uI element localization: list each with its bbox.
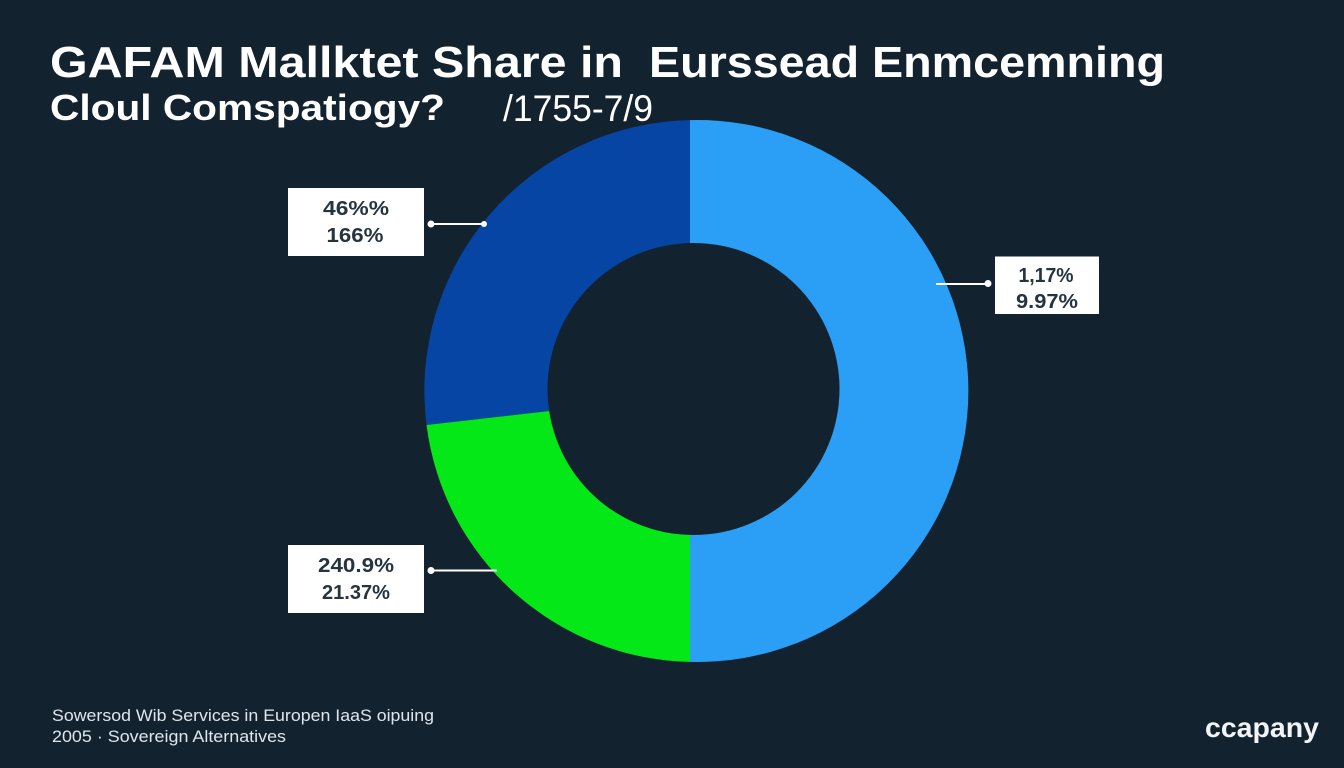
label box — [288, 545, 424, 613]
title line 1, first part: GAFAM Mallktet Share in — [50, 38, 623, 87]
connector — [428, 567, 497, 574]
title date range: /1755-7/9 — [503, 88, 653, 129]
label values — [323, 198, 389, 247]
label values: 240.9% — [318, 555, 394, 577]
label values: 9.97% — [1016, 291, 1078, 313]
footer source note: 2005 · Sovereign Alternatives — [52, 727, 286, 746]
label values — [318, 555, 394, 604]
label values: 21.37% — [322, 582, 390, 604]
donut chart — [424, 120, 968, 662]
segment: light blue — [690, 120, 968, 662]
segment: dark blue — [424, 120, 690, 425]
connector — [936, 280, 992, 287]
callout: green segment — [288, 545, 497, 613]
title line 2: Cloul Comspatiogy? — [50, 87, 445, 128]
footer source note: Sowersod Wib Services in Europen IaaS oipuing — [52, 706, 434, 725]
label values: 1,17% — [1018, 265, 1074, 287]
label values — [1016, 265, 1078, 313]
segment: green — [426, 395, 690, 662]
footer source note — [52, 706, 434, 746]
label box — [288, 188, 424, 256]
title line 1, second part: Eurssead Enmcemning — [649, 38, 1165, 87]
callout: dark blue segment — [288, 188, 487, 256]
connector — [428, 220, 487, 228]
label values: 46%% — [323, 198, 389, 220]
donut hole — [548, 243, 840, 535]
title — [50, 38, 1165, 129]
callout: light blue segment — [936, 256, 1099, 314]
logo wordmark: ccapany — [1205, 712, 1319, 743]
label values: 166% — [326, 225, 384, 247]
label box — [995, 256, 1099, 314]
